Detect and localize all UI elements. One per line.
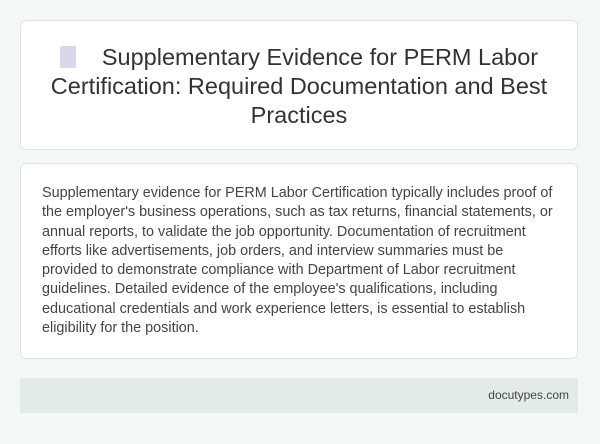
body text: guidelines. Detailed evidence of the employee's qualifications, including [42, 281, 498, 297]
footer [20, 378, 578, 413]
footer text: docutypes.com [488, 388, 569, 402]
text panel [20, 163, 578, 359]
body text: annual reports, to validate the job opportunity. Documentation of recruitment [42, 224, 526, 240]
body text: educational credentials and work experience letters, is essential to establish [42, 301, 525, 317]
body text: provided to demonstrate compliance with Department of Labor recruitment [42, 262, 516, 278]
body text: Supplementary evidence for PERM Labor Certification typically includes proof of [42, 185, 552, 201]
body text: the employer's business operations, such as tax returns, financial statements, or [42, 204, 553, 220]
title panel [20, 20, 578, 150]
body text: eligibility for the position. [42, 320, 199, 336]
body text: efforts like advertisements, job orders, and interview summaries must be [42, 243, 503, 259]
title: Supplementary Evidence for PERM Labor Certification: Required Documentation and Best Practices [51, 44, 547, 128]
body text [42, 185, 553, 336]
